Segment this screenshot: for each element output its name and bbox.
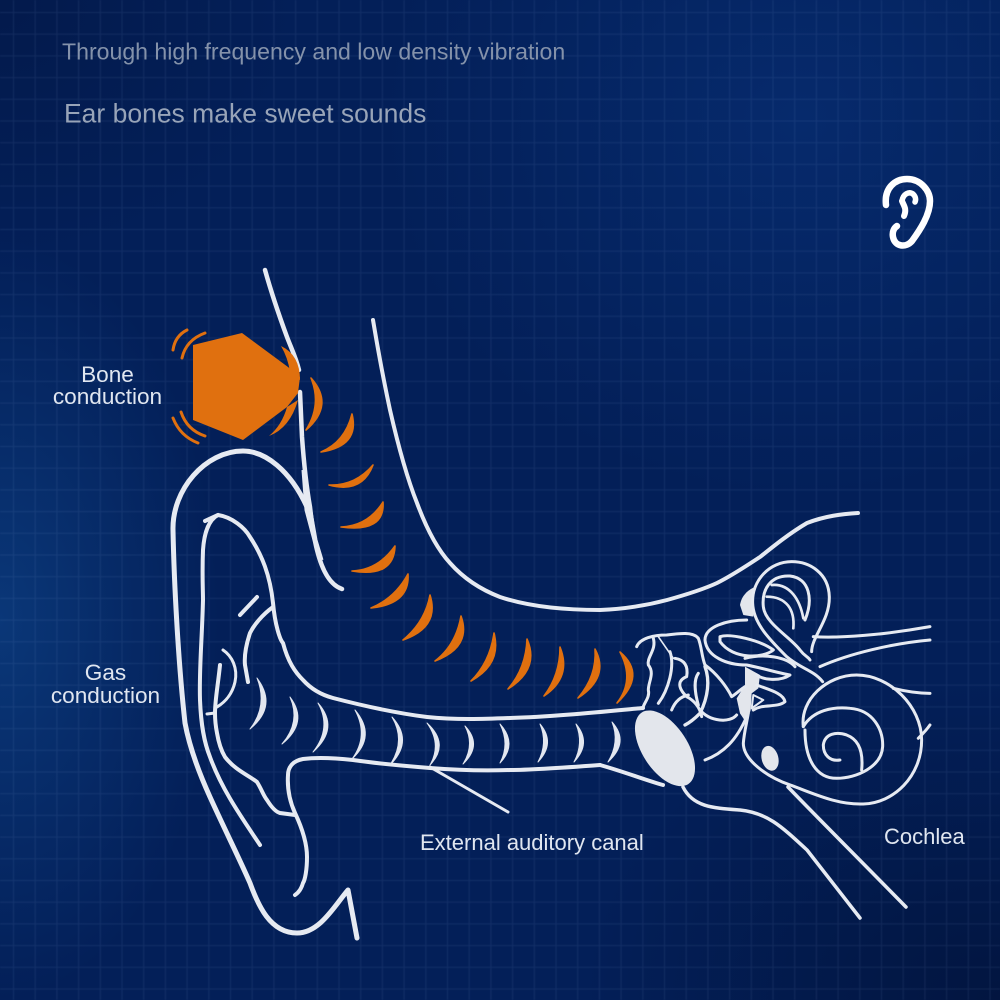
ossicles [637,620,795,760]
headband / skull line [265,270,858,610]
label: gas conduction: conduction [51,683,160,708]
title: Ear bones make sweet sounds [64,98,426,128]
nerve lines [813,627,930,738]
lower jaw lines [683,787,906,918]
cochlea spiral [743,675,922,804]
semicircular canals [740,562,829,682]
oval window [759,744,781,773]
speaker vibration marks [173,330,300,443]
eardrum [623,700,707,796]
wedge where lines merge [303,470,322,560]
orange sound waves [306,378,633,703]
label: gas conduction [51,660,160,708]
inner ear [623,562,930,804]
label: external auditory canal: External auditory canal [420,830,644,855]
label: bone conduction: Bone [81,362,134,387]
label: gas conduction: Gas [85,660,126,685]
icon: ear [886,179,930,246]
canal vibration arcs [250,678,620,765]
label: bone conduction [53,362,162,409]
label: bone conduction: conduction [53,384,162,409]
subtitle: Through high frequency and low density vibration [62,38,565,64]
label: cochlea: Cochlea [884,824,965,849]
bone conduction speaker [193,333,300,440]
outer ear outline [173,451,663,938]
